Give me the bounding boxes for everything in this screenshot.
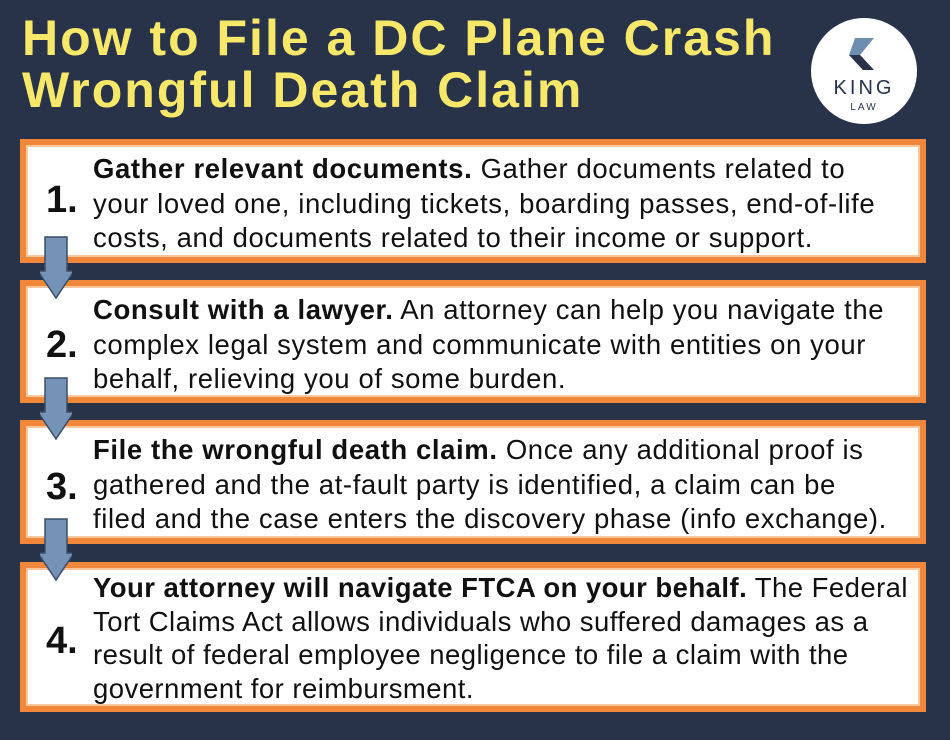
panel: step 1 xyxy=(20,139,926,263)
text step 2 xyxy=(93,294,884,394)
text step 1: Gather relevant documents. Gather documents related to xyxy=(93,153,845,184)
number 3: 3. xyxy=(46,466,78,508)
logo: King Law: KING xyxy=(834,77,894,99)
text step 4: government for reimbursment. xyxy=(93,672,474,704)
panel: step 4 xyxy=(20,562,926,712)
title xyxy=(22,10,775,118)
text step 3: filed and the case enters the discovery phase (info exchange). xyxy=(93,503,887,534)
text step 4: Tort Claims Act allows individuals who suffered damages as a xyxy=(93,606,868,636)
logo: King Law xyxy=(811,18,917,124)
text step 2: complex legal system and communicate with entities on your xyxy=(93,328,866,360)
title: Wrongful Death Claim xyxy=(22,62,583,118)
logo: King Law: LAW xyxy=(850,102,878,113)
title: How to File a DC Plane Crash xyxy=(22,10,775,66)
text step 3: File the wrongful death claim. Once any additional proof is xyxy=(93,434,864,465)
arrow 3 xyxy=(40,518,72,582)
arrow 1 xyxy=(40,236,72,300)
text step 1: your loved one, including tickets, boarding passes, end-of-life xyxy=(93,188,875,218)
text step 4: result of federal employee negligence to file a claim with the xyxy=(93,639,849,670)
text step 4: Your attorney will navigate FTCA on your behalf. The Federal xyxy=(93,572,908,603)
panel: step 2 xyxy=(20,280,926,403)
text step 4 xyxy=(93,572,908,704)
text step 3: gathered and the at-fault party is identified, a claim can be xyxy=(93,468,836,500)
number 1: 1. xyxy=(46,179,78,221)
arrow 2 xyxy=(40,377,72,440)
text step 2: behalf, relieving you of some burden. xyxy=(93,363,566,394)
text step 2: Consult with a lawyer. An attorney can help you navigate the xyxy=(93,294,884,325)
text step 3 xyxy=(93,434,887,534)
number 4: 4. xyxy=(46,620,78,662)
panel: step 3 xyxy=(20,420,926,544)
number 2: 2. xyxy=(46,324,78,366)
text step 1 xyxy=(93,153,875,253)
text step 1: costs, and documents related to their income or support. xyxy=(93,222,813,253)
